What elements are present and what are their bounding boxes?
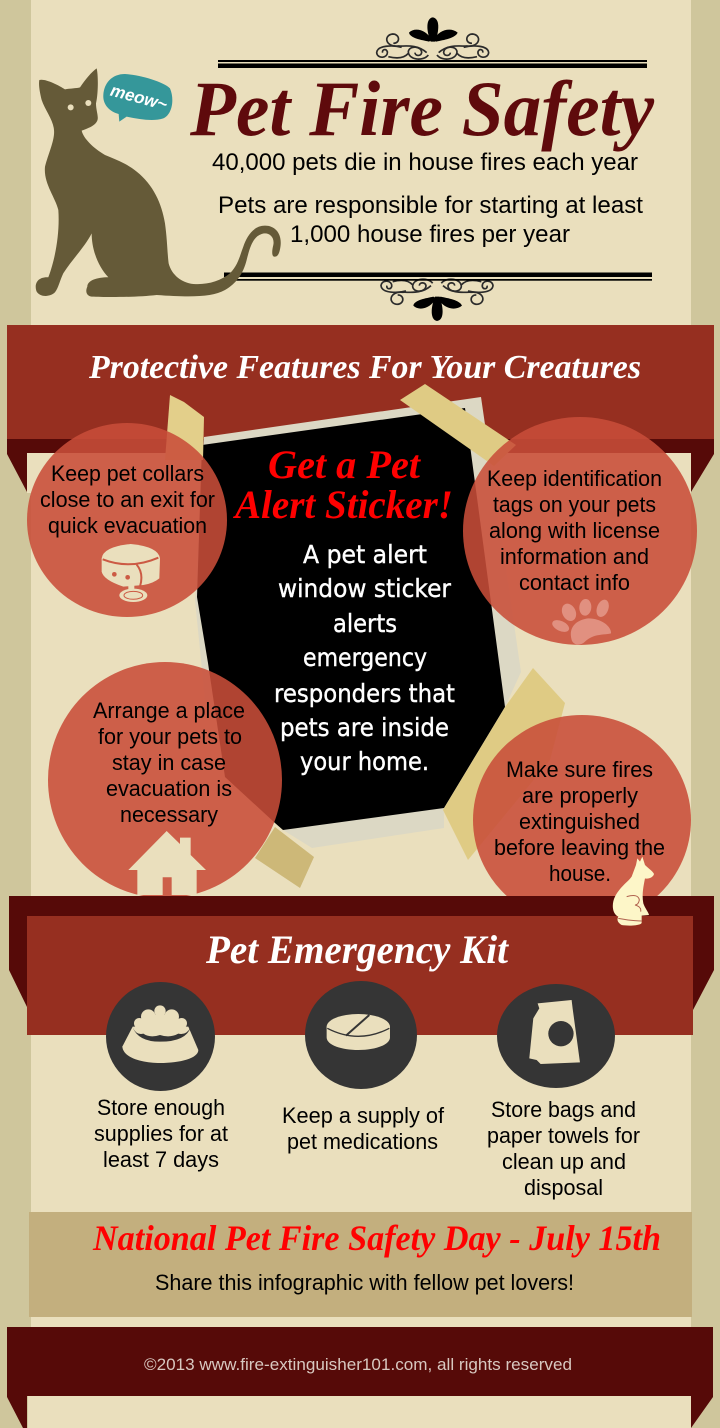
- panel: circle safe place: [48, 662, 282, 898]
- text block: fire statistics: Pets are responsible for starting at least: [218, 192, 643, 219]
- text: clean up bags: [487, 1097, 640, 1200]
- text block: sticker description: responders that: [274, 679, 455, 708]
- ribbon: protective features: [7, 325, 714, 492]
- panel: circle identification tags: tags on your pets: [493, 492, 656, 517]
- panel: national pet fire safety day: Share this infographic with fellow pet lovers!: [155, 1270, 574, 1295]
- tape: bottom left: [255, 827, 314, 888]
- heading: protective features: Protective Features For Your Creatures: [88, 349, 641, 386]
- text block: fire statistics: 40,000 pets die in house fires each year: [212, 149, 638, 176]
- text: clean up bags: disposal: [524, 1175, 603, 1200]
- text block: sticker description: alerts: [333, 609, 397, 638]
- panel: pet alert sticker photo: [165, 395, 521, 848]
- text block: sticker description: A pet alert: [303, 540, 427, 569]
- icon: food bowl: [106, 982, 215, 1091]
- panel: circle safe place: evacuation is: [106, 776, 232, 801]
- speech bubble: meow: [103, 74, 172, 122]
- ornament: top flourish: [377, 17, 489, 59]
- panel: circle extinguish fires: house.: [549, 861, 611, 886]
- panel: circle safe place: Arrange a place: [93, 698, 245, 723]
- text block: sticker description: [274, 540, 455, 776]
- heading: get a pet alert sticker: Get a Pet: [268, 442, 422, 487]
- text block: fire statistics: [212, 149, 643, 248]
- panel: circle identification tags: along with license: [489, 518, 660, 543]
- text block: sticker description: emergency: [303, 643, 427, 672]
- icon: supply bag: [497, 984, 615, 1088]
- panel: circle identification tags: contact info: [519, 570, 630, 595]
- panel: circle safe place: stay in case: [112, 750, 226, 775]
- panel: circle identification tags: [463, 417, 697, 645]
- footer ribbon: [7, 1327, 713, 1428]
- icon: sitting cat: [613, 857, 654, 926]
- panel: circle collars: close to an exit for: [40, 487, 215, 512]
- tape: top left: [165, 395, 204, 460]
- text: store supplies: [94, 1095, 228, 1172]
- panel: circle safe place: necessary: [120, 802, 218, 827]
- text: medications: pet medications: [287, 1129, 438, 1154]
- footer ribbon: ©2013 www.fire-extinguisher101.com, all rights reserved: [144, 1355, 572, 1374]
- icon: paw print: [550, 598, 611, 645]
- panel: circle identification tags: information and: [500, 544, 649, 569]
- panel: circle collars: [27, 423, 227, 617]
- ribbon: pet emergency kit: [9, 896, 714, 1035]
- text: store supplies: least 7 days: [103, 1147, 219, 1172]
- text: medications: [282, 1103, 445, 1154]
- text: clean up bags: paper towels for: [487, 1123, 640, 1148]
- text block: sticker description: your home.: [300, 747, 429, 776]
- text: store supplies: Store enough: [97, 1095, 225, 1120]
- text block: fire statistics: 1,000 house fires per year: [290, 221, 570, 248]
- heading: get a pet alert sticker: [232, 442, 453, 527]
- icon: pet collar: [102, 544, 160, 602]
- ornament: bottom flourish: [381, 279, 493, 321]
- rule: top double line: [218, 60, 647, 68]
- panel: circle collars: Keep pet collars: [51, 461, 204, 486]
- panel: circle extinguish fires: before leaving the: [494, 835, 665, 860]
- panel: national pet fire safety day: National Pet Fire Safety Day - July 15th: [92, 1218, 661, 1258]
- text: medications: Keep a supply of: [282, 1103, 445, 1128]
- tape: top right: [400, 384, 516, 466]
- panel: circle safe place: for your pets to: [98, 724, 242, 749]
- text: clean up bags: Store bags and: [491, 1097, 636, 1122]
- icon: cat silhouette: [36, 68, 281, 297]
- icon: pill: [305, 981, 417, 1089]
- rule: bottom double line: [224, 272, 652, 281]
- panel: circle identification tags: Keep identification: [487, 466, 662, 491]
- heading: get a pet alert sticker: Alert Sticker!: [232, 482, 453, 527]
- panel: circle extinguish fires: are properly: [522, 783, 638, 808]
- text: clean up bags: clean up and: [502, 1149, 626, 1174]
- heading: pet emergency kit: Pet Emergency Kit: [205, 927, 510, 972]
- title: Pet Fire Safety: [189, 65, 654, 152]
- text block: sticker description: pets are inside: [280, 713, 449, 742]
- icon: house: [128, 831, 206, 895]
- panel: circle extinguish fires: extinguished: [519, 809, 640, 834]
- tape: bottom right: [443, 668, 565, 860]
- panel: circle collars: quick evacuation: [48, 513, 207, 538]
- panel: circle extinguish fires: [473, 715, 691, 925]
- text block: sticker description: window sticker: [278, 574, 452, 603]
- panel: circle extinguish fires: Make sure fires: [506, 757, 653, 782]
- text: store supplies: supplies for at: [94, 1121, 228, 1146]
- speech bubble: meow: meow~: [108, 81, 169, 114]
- panel: national pet fire safety day: [29, 1212, 692, 1317]
